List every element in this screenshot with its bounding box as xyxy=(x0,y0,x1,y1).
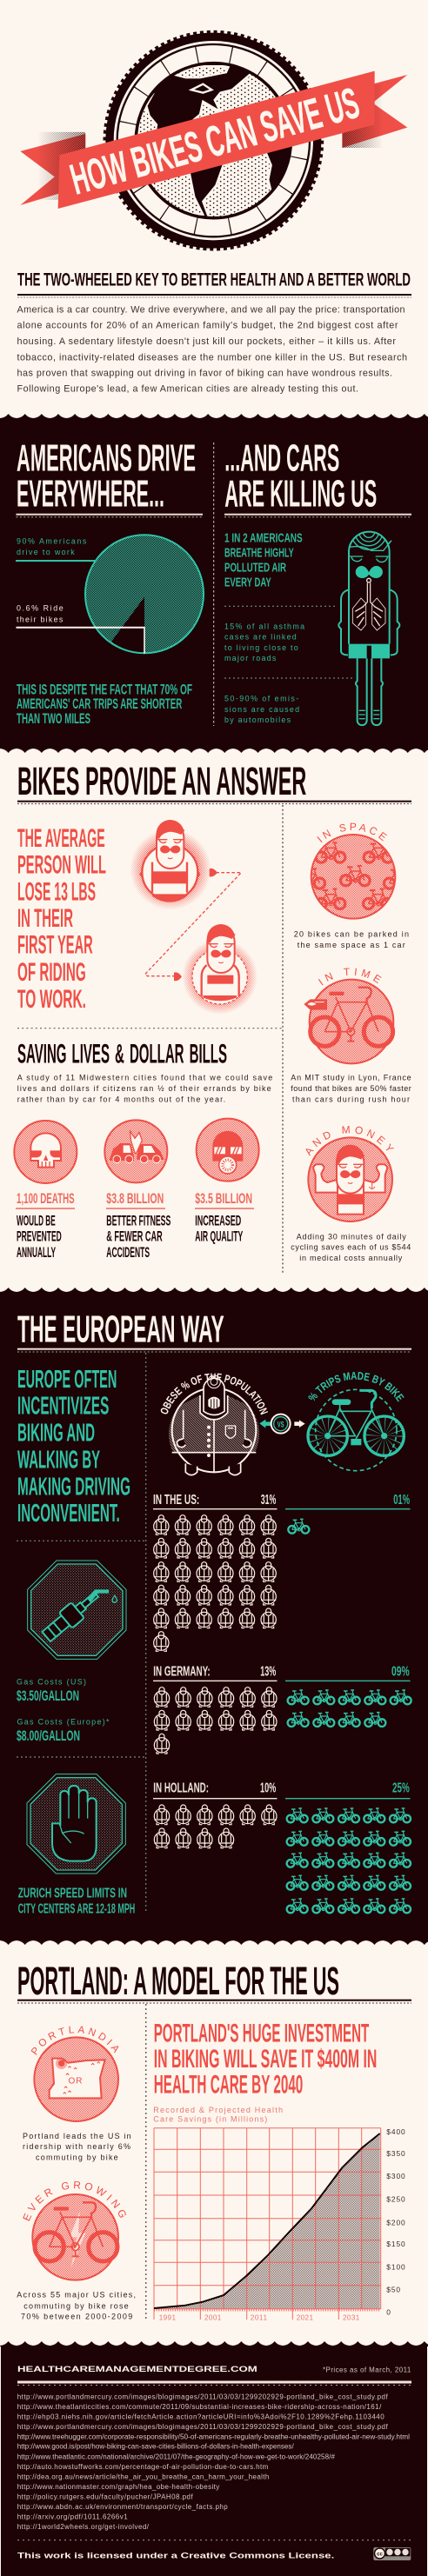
icon: gas nozzle sign xyxy=(28,1561,126,1659)
source list: http://www.treehugger.com/corporate-responsibility/50-of-americans-regularly-breathe-unhealthy-polluted-air-new-study.html xyxy=(17,2433,410,2440)
caption: Portlandia: ridership with nearly 6% xyxy=(23,2142,130,2151)
license statement: This work is licensed under a Creative Commons License. xyxy=(17,2552,334,2560)
caption: and money: cycling saves each of us $544 xyxy=(291,1243,411,1252)
y axis labels: $150 xyxy=(386,2240,405,2248)
caption: ever growing: commuting by bike rose xyxy=(23,2301,129,2310)
caption: and money xyxy=(291,1232,411,1262)
fact: asthma: major roads xyxy=(224,654,277,662)
caption: ever growing: Across 55 major US cities, xyxy=(17,2291,136,2300)
pictogram: Holland obesity xyxy=(154,1805,277,1848)
icon: teal bike xyxy=(306,1372,405,1471)
text: Zurich speed limits: ZURICH SPEED LIMITS IN xyxy=(18,1886,127,1900)
caption: in space xyxy=(294,929,409,949)
text: gas costs xyxy=(17,1677,110,1744)
callout: polluted air: BREATHE HIGHLY xyxy=(224,546,294,561)
icon: obese man: OBESE % OF THE POPULATION xyxy=(160,1374,268,1415)
icon: in space badge xyxy=(310,822,397,920)
pie label: 0.6 percent xyxy=(17,604,64,623)
row header: in Holland: 25% xyxy=(392,1781,410,1796)
text: midwestern study: rather than by car for 4 months out of the year. xyxy=(17,1095,225,1103)
stat: deaths prevented: 1,100 DEATHS xyxy=(17,1190,75,1207)
pie label: 90 percent: drive to work xyxy=(17,548,75,556)
icon: bicycle wheel xyxy=(105,32,322,249)
callout: short trips: THIS IS DESPITE THE FACT THAT 70% OF xyxy=(17,682,192,697)
icon: in time badge xyxy=(304,968,395,1064)
x axis labels: 2001 xyxy=(204,2313,222,2321)
source list: http://arxiv.org/pdf/1011.6266v1 xyxy=(17,2513,128,2521)
icon: car crash xyxy=(104,1120,167,1182)
icon: creative commons badge xyxy=(373,2547,411,2560)
source list: http://www.portlandmercury.com/images/blogimages/2011/03/03/1299202929-portland_bike_cost_study.pdf xyxy=(17,2393,388,2400)
stat: deaths prevented: PREVENTED xyxy=(17,1228,62,1245)
fact: emissions: sions are caused xyxy=(224,705,299,714)
row header: in Holland xyxy=(153,1781,411,1799)
text: gas costs: Gas Costs (Europe)* xyxy=(17,1717,110,1726)
fact: asthma: to living close to xyxy=(224,643,298,652)
intro text xyxy=(17,304,407,395)
intro text: Following Europe's lead, a few American cities are already testing this out. xyxy=(17,384,358,395)
callout: Europe incentivizes biking: INCONVENIENT. xyxy=(17,1500,120,1528)
text: Zurich speed limits xyxy=(18,1886,135,1916)
icon: gas mask xyxy=(197,1119,259,1181)
intro text: America is a car country. We drive everywhere, and we all pay the price: transportation xyxy=(17,304,405,315)
source list: http://auto.howstuffworks.com/percentage-of-air-pollution-due-to-cars.htm xyxy=(17,2463,269,2471)
icon: obese man xyxy=(160,1374,268,1476)
callout: polluted air: POLLUTED AIR xyxy=(224,561,286,576)
source list: http://www.theatlantic.com/national/archive/2011/07/the-geography-of-how-we-get-to-work/240258/# xyxy=(17,2453,336,2460)
caption: in time: found that bikes are 50% faster xyxy=(291,1084,411,1093)
icon: Portlandia badge: OR xyxy=(69,2076,83,2086)
caption: ever growing: 70% between 2000-2009 xyxy=(21,2312,132,2320)
heading: $400M investment xyxy=(154,2019,377,2099)
source list: http://policy.rutgers.edu/faculty/pucher/JPAH08.pdf xyxy=(17,2493,193,2500)
pie label: 0.6 percent: their bikes xyxy=(17,615,64,623)
row header: in Holland: 10% xyxy=(260,1781,276,1796)
stat: air quality: INCREASED xyxy=(195,1212,241,1228)
stat: air quality: $3.5 BILLION xyxy=(195,1190,252,1207)
pictogram: US bike trips xyxy=(288,1519,309,1534)
y axis labels: $250 xyxy=(386,2195,405,2204)
pie label: 90 percent: 90% Americans xyxy=(17,537,87,546)
icon: versus xyxy=(259,1414,305,1434)
caption: and money: in medical costs annually xyxy=(299,1254,403,1262)
icon: weight loss men xyxy=(130,820,257,1015)
source list: http://www.good.is/post/how-biking-can-save-cities-billions-of-dollars-in-health-expenses/ xyxy=(17,2443,294,2451)
stat: fitness savings: $3.8 BILLION xyxy=(106,1190,164,1207)
stat: air quality: AIR QUALITY xyxy=(195,1228,244,1245)
source list: http://www.abdn.ac.uk/environment/transport/cycle_facts.php xyxy=(17,2503,228,2511)
pie label: 0.6 percent: 0.6% Ride xyxy=(17,604,64,613)
row header: in the US xyxy=(153,1493,411,1509)
arrow: progress xyxy=(145,869,241,981)
source list: http://ehp03.niehs.nih.gov/article/fetchArticle.action?articleURI=info%3Adoi%2F10.1289%2Fehp.1103440 xyxy=(17,2413,385,2420)
text: midwestern study xyxy=(17,1074,272,1103)
icon: skull xyxy=(14,1121,77,1183)
caption: in space: 20 bikes can be parked in xyxy=(294,929,409,938)
icon: globe xyxy=(133,64,290,217)
caption: in time: than cars during rush hour xyxy=(292,1095,410,1103)
icon: and money badge xyxy=(306,1126,394,1222)
stat: deaths prevented: WOULD BE xyxy=(17,1212,56,1228)
icon: ever growing badge xyxy=(23,2181,126,2281)
x axis labels: 2011 xyxy=(251,2313,267,2321)
callout: polluted air xyxy=(224,530,303,589)
footer source name: HEALTHCAREMANAGEMENTDEGREE.COM xyxy=(17,2365,257,2373)
x axis labels: 1991 xyxy=(159,2313,176,2321)
source list: http://1world2wheels.org/get-involved/ xyxy=(17,2523,150,2531)
caption: Portlandia: Portland leads the US in xyxy=(23,2132,131,2140)
pictogram: US obesity xyxy=(154,1515,276,1651)
callout: lose 13 lbs xyxy=(17,824,106,1014)
icon: teal bike: % TRIPS MADE BY BIKE xyxy=(308,1372,405,1401)
fact: asthma: 15% of all asthma xyxy=(224,622,304,630)
stat: fitness savings: & FEWER CAR xyxy=(106,1228,163,1245)
chart title: Recorded & Projected Health xyxy=(153,2106,283,2114)
callout: Europe incentivizes biking xyxy=(17,1366,130,1528)
icon: and money badge: AND MONEY xyxy=(306,1126,394,1156)
panel: footer xyxy=(0,2341,428,2576)
text: Zurich speed limits: CITY CENTERS ARE 12-18 MPH xyxy=(18,1901,135,1916)
fact: asthma xyxy=(224,622,304,662)
fact: emissions: 50-90% of emis- xyxy=(224,695,298,703)
pie chart xyxy=(16,535,204,654)
source list: http://www.portlandmercury.com/images/blogimages/2011/03/03/1299202929-portland_bike_cost_study.pdf xyxy=(17,2423,388,2431)
caption: Portlandia: commuting by bike xyxy=(36,2153,118,2162)
chart title xyxy=(153,2106,283,2124)
line chart: health care savings xyxy=(154,2127,405,2321)
callout: Europe incentivizes biking: EUROPE OFTEN xyxy=(17,1366,117,1394)
icons: benefit badges xyxy=(14,1119,259,1183)
heading: Americans drive everywhere: EVERYWHERE... xyxy=(17,473,164,516)
icon: Portlandia badge: PORTLANDIA xyxy=(31,2026,118,2055)
callout: short trips: AMERICANS' CAR TRIPS ARE SHORTER xyxy=(17,696,182,712)
pictogram: Germany bike trips xyxy=(288,1690,411,1727)
row header: in the US: IN THE US: xyxy=(153,1493,199,1508)
x axis labels: 2031 xyxy=(343,2313,360,2321)
intro text: alone accounts for 20% of an American family's budget, the 2nd biggest cost after xyxy=(17,321,398,331)
icon: creative commons badge: cc xyxy=(377,2553,383,2558)
y axis labels: $50 xyxy=(386,2286,400,2294)
row header: in the US: 31% xyxy=(261,1493,276,1508)
text: gas costs: Gas Costs (US) xyxy=(17,1677,86,1686)
y axis labels: $100 xyxy=(386,2262,405,2271)
callout: Europe incentivizes biking: WALKING BY xyxy=(17,1446,100,1474)
stat: fitness savings: BETTER FITNESS xyxy=(106,1212,171,1228)
icon: Portlandia badge xyxy=(31,2026,119,2122)
panel: the European way xyxy=(0,1288,428,1945)
stat: fitness savings xyxy=(106,1190,171,1261)
pie label: 90 percent xyxy=(17,537,87,556)
row header: in Germany: 09% xyxy=(391,1664,410,1679)
icon: versus: VS xyxy=(278,1421,284,1429)
source list: http://www.theatlanticcities.com/commute/2011/09/substantial-increases-bike-ridership-across-nation/161/ xyxy=(17,2403,382,2411)
text: midwestern study: A study of 11 Midwestern cities found that we could save xyxy=(17,1074,272,1082)
banner ribbon xyxy=(20,71,407,209)
y axis labels: 0 xyxy=(386,2308,391,2317)
caption: ever growing xyxy=(17,2291,136,2320)
callout: lose 13 lbs: FIRST YEAR xyxy=(17,931,93,960)
stat: fitness savings: ACCIDENTS xyxy=(106,1244,150,1261)
row header: in Germany: 13% xyxy=(260,1664,276,1679)
icon: stop hand sign xyxy=(27,1774,125,1874)
source list: http://dea.org.au/news/article/the_air_you_breathe_can_harm_your_health xyxy=(17,2473,269,2480)
text: gas costs: $3.50/GALLON xyxy=(17,1688,79,1704)
caption: and money: Adding 30 minutes of daily xyxy=(297,1232,406,1241)
icon: slimmer man xyxy=(182,924,257,1015)
icon: obese population vs bike trips xyxy=(160,1372,405,1476)
callout: Europe incentivizes biking: INCENTIVIZES xyxy=(17,1393,109,1421)
callout: Europe incentivizes biking: MAKING DRIVING xyxy=(17,1473,130,1501)
x axis labels xyxy=(159,2313,360,2321)
chart title: Care Savings (in Millions) xyxy=(153,2115,267,2124)
caption: in space: the same space as 1 car xyxy=(298,941,405,949)
callout: lose 13 lbs: OF RIDING xyxy=(17,958,86,987)
panel: driving and pollution xyxy=(0,414,428,753)
stat: air quality xyxy=(195,1190,254,1245)
fact: asthma: cases are linked xyxy=(224,633,297,642)
text: PERSON WILL xyxy=(17,851,106,880)
stat: deaths prevented xyxy=(16,1190,75,1261)
intro text: tobacco, inactivity-related diseases are the number one killer in the US. But research xyxy=(17,352,407,363)
icon: in space badge: IN SPACE xyxy=(317,822,387,843)
stat: deaths prevented: ANNUALLY xyxy=(17,1244,56,1261)
fact: emissions xyxy=(224,695,299,724)
panel: driving and pollution: AMERICANS DRIVE xyxy=(17,437,196,480)
row header: in Germany: IN GERMANY: xyxy=(153,1664,211,1679)
callout: polluted air: EVERY DAY xyxy=(224,575,271,589)
y axis labels: $200 xyxy=(386,2218,405,2227)
heading: and cars are killing us xyxy=(224,437,377,516)
y axis labels: $400 xyxy=(386,2127,405,2136)
y axis labels: $350 xyxy=(386,2149,405,2158)
intro text: housing. A sedentary lifestyle doesn't just kill our pockets, either – it kills us. After xyxy=(17,336,396,347)
callout: short trips: THAN TWO MILES xyxy=(17,711,90,727)
caption: in time: An MIT study in Lyon, France xyxy=(291,1074,411,1082)
icon: heavy man xyxy=(130,820,211,910)
y axis labels: $300 xyxy=(386,2172,405,2180)
badge: wheel, globe and banner xyxy=(20,32,407,249)
caption: Portlandia xyxy=(23,2132,131,2162)
icon: in time badge: IN TIME xyxy=(318,968,381,986)
callout: polluted air: 1 IN 2 AMERICANS xyxy=(224,530,303,545)
caption: in time xyxy=(291,1074,411,1103)
icon: man with lungs xyxy=(338,514,399,725)
row header: in Germany xyxy=(153,1664,411,1681)
footnote: prices: *Prices as of March, 2011 xyxy=(323,2366,411,2373)
pictogram: Holland bike trips xyxy=(287,1808,411,1913)
callout: Europe incentivizes biking: BIKING AND xyxy=(17,1419,95,1447)
text: gas costs: $8.00/GALLON xyxy=(17,1728,80,1744)
intro text: has proven that swapping out driving in favor of biking can have wondrous results. xyxy=(17,369,392,379)
heading: the European way: THE EUROPEAN WAY xyxy=(17,1308,224,1350)
callout: lose 13 lbs: TO WORK. xyxy=(17,985,86,1014)
heading: Americans drive everywhere xyxy=(17,437,196,516)
icon: ever growing badge: EVER GROWING xyxy=(23,2181,126,2221)
callout: lose 13 lbs: LOSE 13 LBS xyxy=(17,877,96,906)
pictogram: Germany obesity xyxy=(154,1687,277,1754)
x axis labels: 2021 xyxy=(297,2313,313,2321)
text: THE AVERAGE xyxy=(17,824,105,853)
y axis labels xyxy=(386,2127,405,2317)
source list: http://www.nationmaster.com/graph/hea_obe-health-obesity xyxy=(17,2483,219,2491)
row header: in the US: 01% xyxy=(393,1493,410,1508)
callout: lose 13 lbs: IN THEIR xyxy=(17,904,73,933)
row header: in Holland: IN HOLLAND: xyxy=(153,1781,209,1796)
fact: emissions: by automobiles xyxy=(224,716,291,724)
source list xyxy=(17,2393,410,2531)
text: midwestern study: lives and dollars if citizens ran ½ of their errands by bike xyxy=(17,1084,271,1093)
callout: short trips xyxy=(17,682,192,727)
